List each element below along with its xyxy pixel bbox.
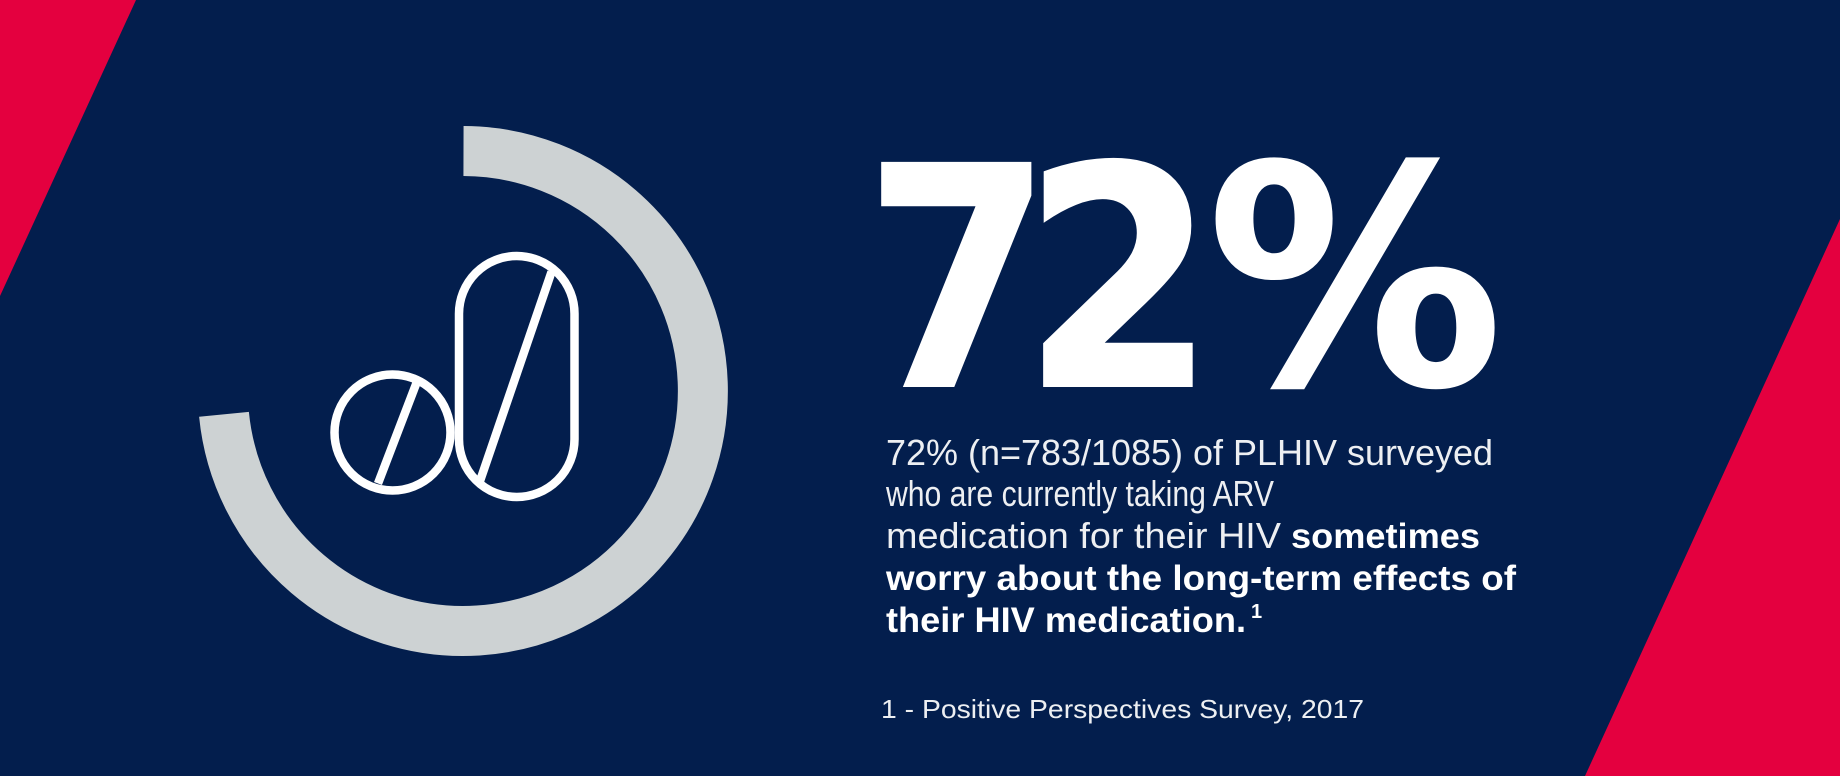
red corner triangle: bottom right <box>1585 219 1840 776</box>
body text: who are currently taking ARV <box>885 473 1274 514</box>
icon: round tablet <box>334 374 450 490</box>
headline: 72%: % <box>1207 102 1503 456</box>
body text: medication for their HIV <box>886 515 1281 556</box>
body text: worry about the long-term effects of <box>885 559 1516 598</box>
body text: sometimes <box>1291 517 1480 556</box>
icon: capsule <box>459 256 574 497</box>
body text: their HIV medication. <box>886 601 1246 640</box>
body text: 1 <box>1251 601 1262 623</box>
headline: 72%: 7 <box>864 103 1052 459</box>
body text <box>885 432 1516 640</box>
headline: 72%: 2 <box>1022 103 1216 459</box>
headline: 72% <box>864 102 1503 459</box>
body text: 72% (n=783/1085) of PLHIV surveyed <box>886 432 1493 473</box>
progress ring: 72 percent <box>224 151 703 631</box>
icon: pills <box>334 256 574 497</box>
footnote: source: 1 - Positive Perspectives Survey, 2017 <box>881 694 1364 724</box>
red corner triangle: top left <box>0 0 136 296</box>
